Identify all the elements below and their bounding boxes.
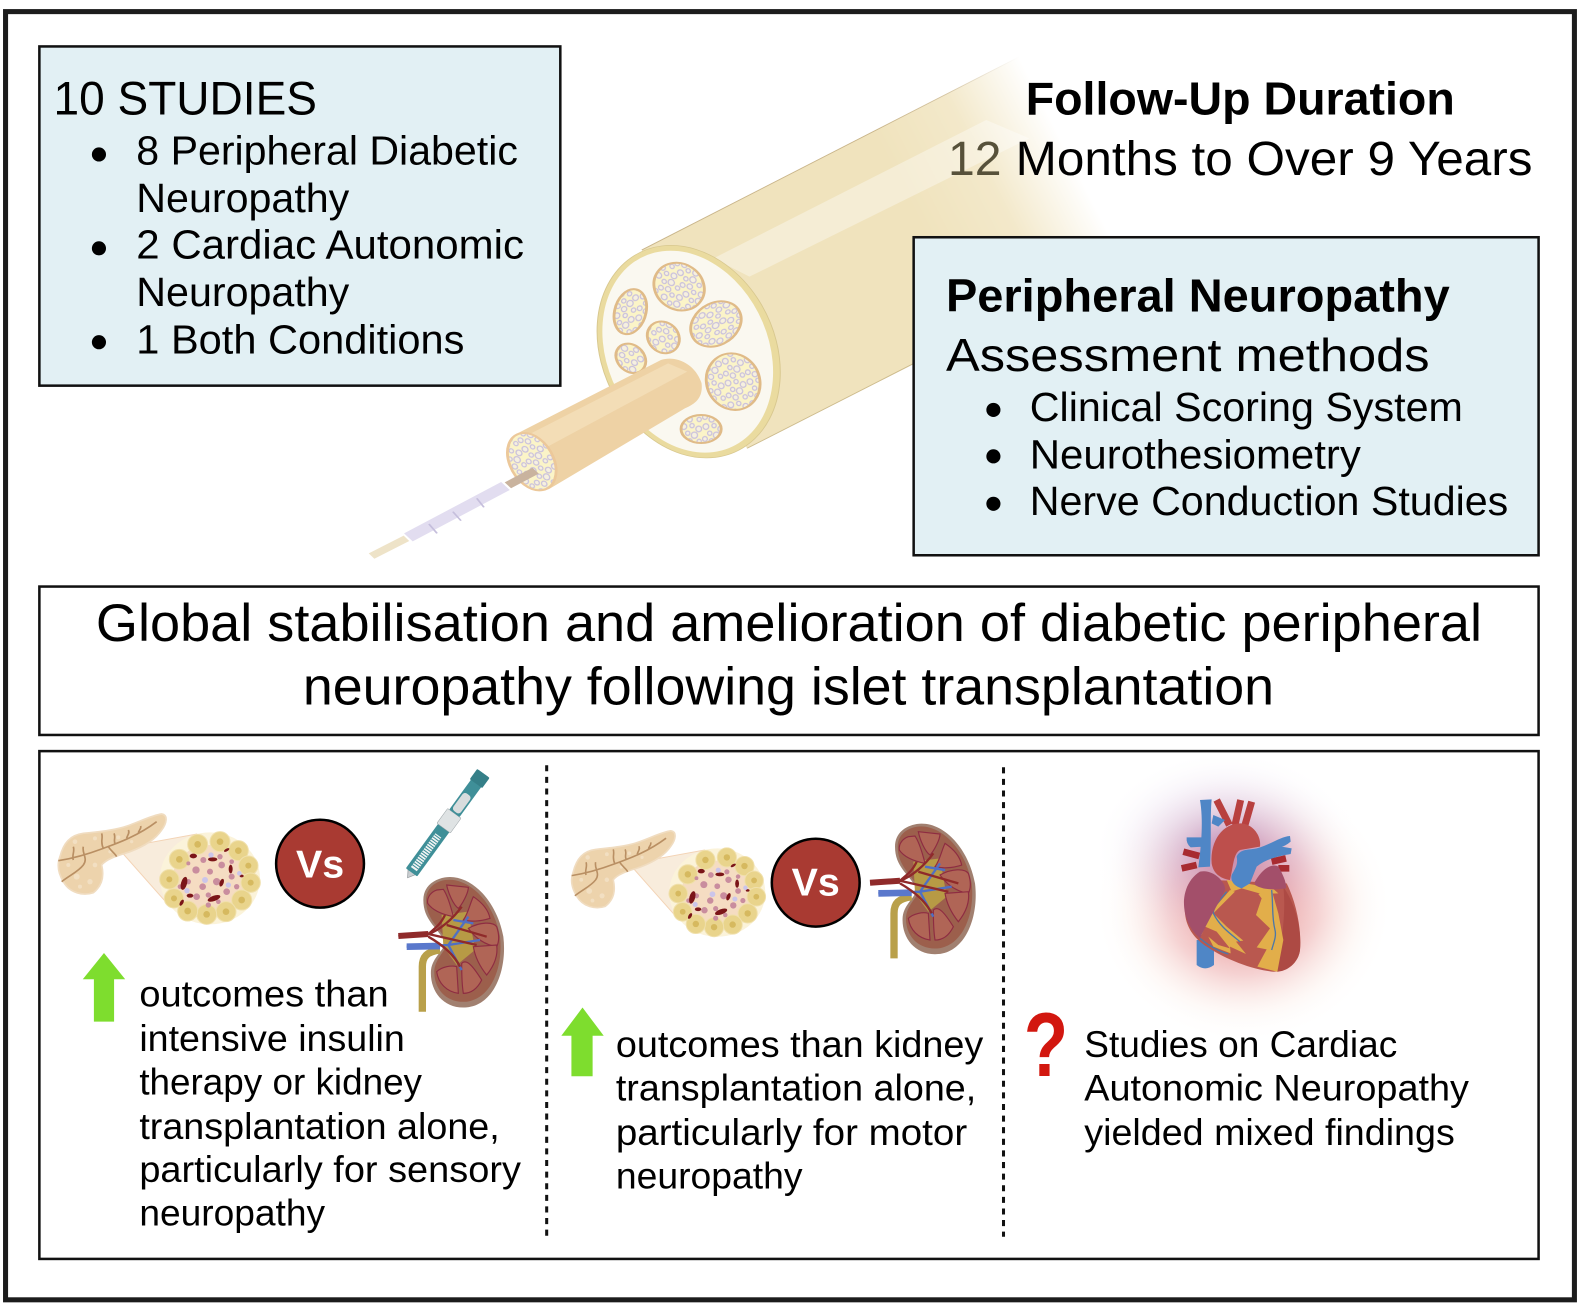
icon: pancreas and islet <box>58 814 260 924</box>
icon: question mark: ? <box>1024 995 1068 1096</box>
text: islet vs insulin or kidney: therapy or kidney <box>139 1060 422 1102</box>
list of methods: Nerve Conduction Studies <box>1030 478 1508 524</box>
icon: up arrow, second <box>561 1008 604 1076</box>
icon: kidney <box>398 877 504 1012</box>
title banner: Global stabilisation and amelioration of diabetic peripheral <box>96 594 1482 653</box>
text: islet vs kidney: outcomes than kidney <box>616 1023 984 1065</box>
list of study types: Neuropathy <box>136 175 350 221</box>
icon: kidney, second <box>870 824 976 958</box>
text: islet vs kidney: particularly for motor <box>616 1111 967 1153</box>
text: islet vs insulin or kidney: outcomes than <box>139 973 389 1015</box>
heading: peripheral neuropathy: Peripheral Neuropathy <box>946 269 1450 321</box>
text: islet vs insulin or kidney: neuropathy <box>139 1192 325 1234</box>
icon: insulin pen <box>401 768 490 883</box>
nerve trunk fading toward upper right <box>642 60 1096 449</box>
axon fibre <box>372 471 536 556</box>
text: cardiac autonomic neuropathy <box>1084 1023 1469 1153</box>
text: islet vs kidney: neuropathy <box>616 1154 803 1196</box>
text: islet vs insulin or kidney <box>139 973 521 1234</box>
list of methods: Neurothesiometry <box>1030 431 1362 477</box>
text: cardiac autonomic neuropathy: Studies on Cardiac <box>1084 1023 1397 1065</box>
follow-up duration text: Follow-Up Duration <box>1026 73 1455 125</box>
list of study types: 1 Both Conditions <box>136 316 464 362</box>
heading: 10 studies: 10 STUDIES <box>54 73 317 126</box>
panel: findings <box>39 750 1539 1259</box>
list of study types: Neuropathy <box>136 269 350 315</box>
text: islet vs insulin or kidney: intensive insulin <box>139 1017 405 1059</box>
nerve cut face <box>574 235 803 468</box>
icon: versus badge <box>276 820 364 908</box>
list of study types <box>92 128 524 362</box>
list of methods: Clinical Scoring System <box>1030 384 1463 430</box>
list of methods <box>986 384 1508 524</box>
text: islet vs insulin or kidney: transplantation alone, <box>139 1105 500 1147</box>
text: islet vs kidney <box>616 1023 984 1196</box>
panel: study counts <box>39 46 560 386</box>
text: islet vs insulin or kidney: particularly for sensory <box>139 1148 521 1190</box>
list of study types: 2 Cardiac Autonomic <box>136 221 524 267</box>
follow-up duration text: Months to Over 9 Years <box>1016 132 1533 186</box>
icon: versus badge, second: Vs <box>792 860 840 904</box>
title banner: neuropathy following islet transplantation <box>303 658 1274 717</box>
icon: pancreas and islet, second <box>572 831 766 937</box>
text: cardiac autonomic neuropathy: Autonomic Neuropathy <box>1084 1066 1469 1108</box>
text: islet vs kidney: transplantation alone, <box>616 1066 976 1108</box>
panel: assessment methods <box>914 237 1539 555</box>
extracted fascicle <box>499 359 702 494</box>
follow-up duration text: 12 <box>948 132 1001 186</box>
icon: versus badge: Vs <box>296 842 344 886</box>
list of study types: 8 Peripheral Diabetic <box>136 128 518 174</box>
icon: versus badge, second <box>772 839 860 927</box>
text: cardiac autonomic neuropathy: yielded mixed findings <box>1084 1111 1455 1153</box>
icon: heart with glow <box>1093 750 1393 1043</box>
title banner <box>39 587 1539 735</box>
icon: up arrow <box>83 953 125 1022</box>
illustration: nerve cross-section <box>372 0 1307 556</box>
follow-up duration text <box>948 73 1533 186</box>
subheading: assessment methods: Assessment methods <box>946 329 1430 381</box>
